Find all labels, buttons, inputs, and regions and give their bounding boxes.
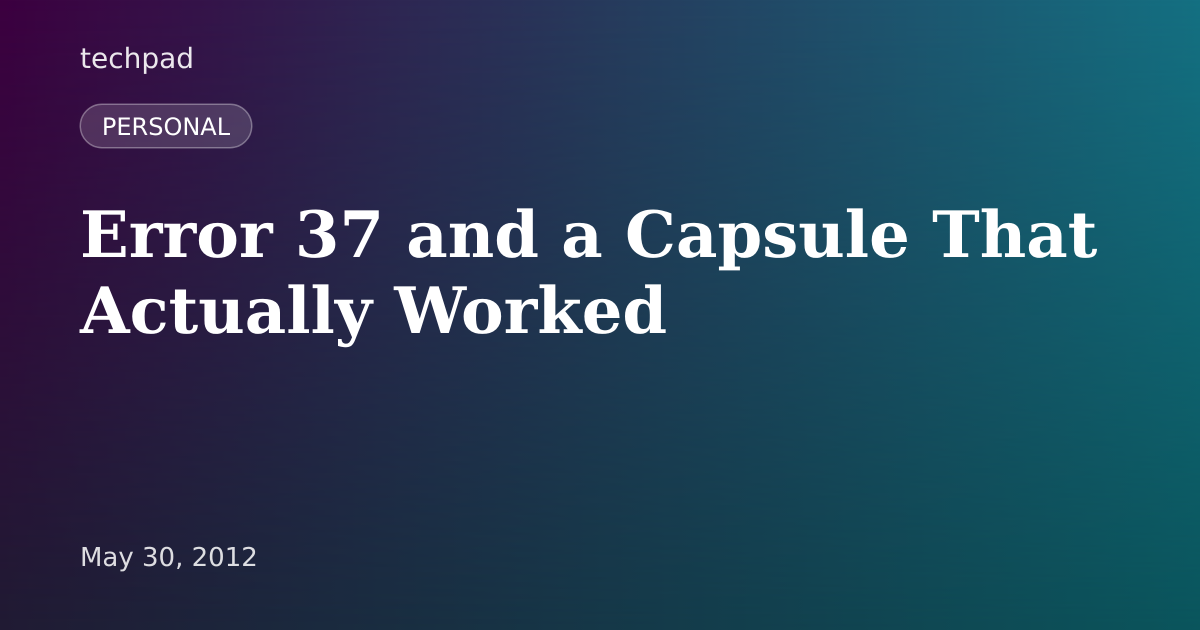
- category badge: [80, 104, 252, 148]
- title: Actually Worked: [80, 274, 667, 349]
- category badge: PERSONAL: [102, 113, 230, 141]
- date: May 30, 2012: [80, 543, 258, 573]
- brand name: techpad: [80, 42, 194, 75]
- title: Error 37 and a Capsule That: [80, 198, 1097, 273]
- background gradient: [0, 130, 1200, 630]
- title: [80, 198, 1097, 349]
